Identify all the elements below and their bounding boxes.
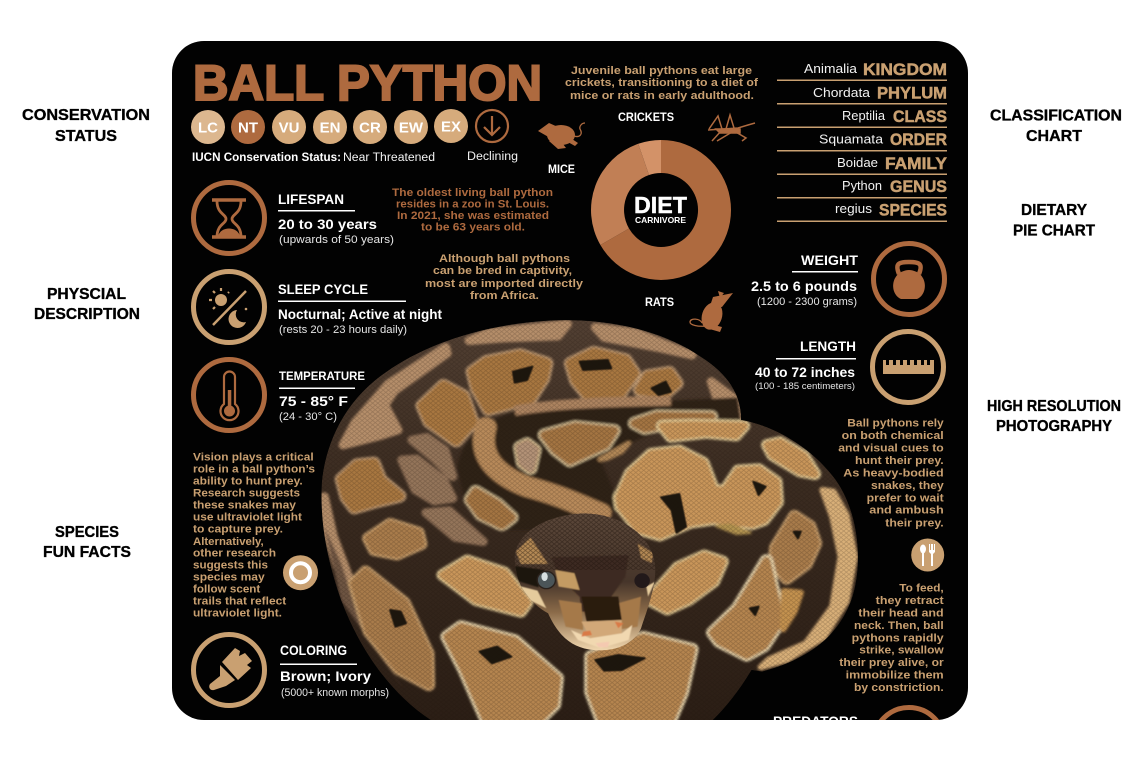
- dietary pie chart: DIET: [634, 192, 687, 218]
- pie label: crickets: CRICKETS: [618, 112, 674, 124]
- fun fact: hunting: prefer to wait: [867, 492, 944, 504]
- fun fact: oldest python: The oldest living ball python: [392, 187, 553, 199]
- fun fact: hunting: [838, 418, 944, 529]
- fun fact: vision: follow scent: [193, 584, 261, 596]
- side label: classification chart: CHART: [1026, 128, 1082, 145]
- icon: mouse: [538, 123, 585, 149]
- fun fact: juvenile diet: [565, 65, 758, 102]
- rank: phylum: PHYLUM: [877, 84, 947, 102]
- fun fact: feeding: by constriction.: [854, 682, 944, 694]
- fun fact: hunting: on both chemical: [842, 430, 944, 442]
- icon: cricket: [708, 115, 755, 141]
- rank: species: SPECIES: [879, 200, 947, 220]
- fun fact: feeding: To feed,: [899, 583, 944, 595]
- rank: order: ORDER: [890, 130, 947, 149]
- fun fact: hunting: and ambush: [869, 505, 944, 517]
- rank: class: CLASS: [893, 107, 947, 126]
- fun fact: juvenile diet: mice or rats in early adulthood.: [570, 90, 754, 102]
- side label: dietary pie chart: [1013, 202, 1095, 240]
- conservation status circles: EX: [441, 118, 461, 136]
- fun fact: vision: these snakes may: [193, 500, 296, 512]
- snake photograph: [320, 310, 881, 730]
- conservation status caption: IUCN Conservation Status:: [192, 152, 341, 164]
- fun fact: hunting: their prey.: [885, 517, 944, 529]
- fun fact: oldest python: to be 63 years old.: [421, 222, 525, 234]
- fun fact: hunting: hunt their prey.: [855, 455, 944, 467]
- panel: lifespan: [194, 182, 394, 254]
- panel: length: (100 - 185 centimeters): [755, 381, 855, 392]
- conservation status circles: EN: [320, 120, 340, 136]
- side label: high resolution photography: PHOTOGRAPHY: [996, 418, 1112, 435]
- rank: order: [777, 133, 948, 152]
- fun fact: feeding: strike, swallow: [859, 644, 944, 656]
- panel: length: 40 to 72 inches: [755, 364, 855, 380]
- panel: weight: (1200 - 2300 grams): [757, 296, 857, 308]
- fun fact: vision: ultraviolet light.: [193, 608, 282, 620]
- conservation status circles: EW: [399, 120, 424, 136]
- fun fact: juvenile diet: Juvenile ball pythons eat large: [571, 65, 752, 77]
- side label: conservation status: [22, 107, 150, 145]
- fun fact: vision: [193, 452, 315, 620]
- panel: coloring: (5000+ known morphs): [281, 687, 389, 699]
- rank: species: [777, 204, 947, 222]
- pie label: rats: RATS: [645, 297, 674, 309]
- fun fact: captivity: most are imported directly: [425, 278, 583, 290]
- rank: genus: GENUS: [890, 177, 947, 196]
- fun fact: hunting: As heavy-bodied: [843, 468, 944, 480]
- side label: physical description: DESCRIPTION: [34, 306, 140, 323]
- side label: classification chart: CLASSIFICATION: [990, 108, 1122, 124]
- icon: kettlebell: [874, 244, 944, 314]
- side label: high resolution photography: HIGH RESOLUTION: [987, 398, 1121, 415]
- fun fact: vision: to capture prey.: [193, 524, 283, 536]
- fun fact: feeding: immobilize them: [846, 669, 944, 681]
- fun fact: vision: other research: [193, 548, 276, 560]
- panel: weight: [751, 244, 944, 314]
- rank: class: [777, 110, 947, 128]
- conservation status circles: [191, 109, 468, 144]
- side label: physical description: PHYSCIAL: [47, 286, 126, 303]
- upper middle coil: [458, 397, 741, 530]
- side label: dietary pie chart: DIETARY: [1021, 202, 1087, 219]
- fun fact: captivity: can be bred in captivity,: [433, 265, 572, 277]
- dark markings: [390, 360, 801, 671]
- side label: species fun facts: FUN FACTS: [43, 544, 131, 561]
- side label: species fun facts: SPECIES: [55, 524, 119, 541]
- fun fact: feeding: neck. Then, ball: [854, 620, 944, 632]
- fun fact: feeding: [839, 583, 945, 694]
- conservation status caption: Declining: [467, 151, 518, 163]
- fun fact: feeding: their prey alive, or: [839, 657, 945, 669]
- rank: phylum: Chordata: [813, 85, 871, 100]
- conservation status circles: NT: [238, 120, 258, 136]
- rank: species: regius: [835, 201, 873, 216]
- fun fact: vision: suggests this: [193, 560, 268, 572]
- panel: sleep cycle: (rests 20 - 23 hours daily): [279, 324, 407, 336]
- fun fact: captivity: from Africa.: [470, 290, 539, 302]
- rank: kingdom: KINGDOM: [863, 60, 947, 79]
- snake head: [513, 510, 657, 650]
- fun fact: feeding: they retract: [876, 595, 944, 607]
- lower and right patches: [324, 527, 404, 690]
- fun fact: juvenile diet: crickets, transitioning to a diet of: [565, 77, 758, 89]
- side label: species fun facts: [43, 524, 131, 561]
- rank: class: Reptilia: [842, 108, 886, 123]
- icon: rat: [690, 291, 733, 332]
- dietary pie chart: [591, 140, 731, 280]
- panel: length: LENGTH: [800, 339, 856, 354]
- classification chart: [777, 60, 948, 222]
- panel: predators (cropped): [773, 708, 944, 760]
- fun fact: vision: use ultraviolet light: [193, 512, 302, 524]
- panel: temperature: 75 - 85° F: [279, 393, 348, 409]
- icon: declining arrow: [476, 110, 508, 142]
- side label: classification chart: [990, 108, 1122, 145]
- panel: infographic poster: [172, 41, 968, 760]
- fun fact: vision: Research suggests: [193, 488, 300, 500]
- panel: sleep cycle: Nocturnal; Active at night: [278, 306, 442, 322]
- conservation status circles: VU: [279, 120, 299, 136]
- fun fact: feeding: pythons rapidly: [852, 633, 944, 645]
- panel: coloring: COLORING: [280, 643, 347, 658]
- panel: lifespan: 20 to 30 years: [278, 216, 377, 232]
- side label: conservation status: CONSERVATION: [22, 107, 150, 124]
- scale texture: [320, 310, 881, 730]
- panel: temperature: (24 - 30° C): [279, 411, 337, 423]
- panel: coloring: [194, 634, 389, 706]
- panel: lifespan: (upwards of 50 years): [279, 234, 394, 246]
- icon: paint brush: [194, 634, 264, 706]
- rank: kingdom: Animalia: [804, 61, 858, 76]
- side label: physical description: [34, 286, 140, 323]
- conservation status caption: [192, 151, 518, 162]
- panel: temperature: TEMPERATURE: [279, 369, 365, 383]
- panel: length: [755, 332, 944, 402]
- rank: genus: Python: [842, 178, 882, 193]
- conservation status caption: Near Threatened: [343, 152, 435, 164]
- icon: hourglass: [194, 182, 264, 254]
- fun fact: vision: Alternatively,: [193, 536, 264, 548]
- title: BALL PYTHON: [193, 55, 542, 111]
- icon: fork and spoon: [911, 538, 944, 572]
- fun fact: oldest python: resides in a zoo in St. Louis.: [396, 198, 549, 210]
- fun fact: vision: trails that reflect: [193, 596, 287, 608]
- rank: kingdom: [777, 63, 947, 81]
- fun fact: hunting: Ball pythons rely: [847, 418, 944, 430]
- side label: conservation status: STATUS: [55, 128, 117, 145]
- panel: lifespan: LIFESPAN: [278, 192, 344, 207]
- panel: sleep cycle: SLEEP CYCLE: [278, 282, 368, 297]
- panel: temperature: [194, 360, 365, 430]
- rank: family: Boidae: [837, 155, 878, 170]
- side label: high resolution photography: [987, 398, 1121, 435]
- fun fact: vision: Vision plays a critical: [193, 452, 314, 464]
- fun fact: captivity: Although ball pythons: [439, 253, 570, 265]
- fun fact: captivity: [425, 253, 583, 302]
- pie label: mice: MICE: [548, 164, 575, 176]
- rank: family: [777, 157, 947, 175]
- fun fact: hunting: snakes, they: [871, 480, 944, 492]
- icon: thermometer: [194, 360, 264, 430]
- fun fact: oldest python: In 2021, she was estimated: [397, 210, 549, 222]
- fun fact: vision: ability to hunt prey.: [193, 476, 303, 488]
- side label: dietary pie chart: PIE CHART: [1013, 222, 1095, 240]
- rank: genus: [777, 180, 947, 198]
- fun fact: oldest python: [392, 187, 553, 234]
- rank: family: FAMILY: [885, 154, 948, 173]
- fun fact: hunting: and visual cues to: [838, 443, 944, 455]
- dietary pie chart: CARNIVORE: [635, 215, 686, 225]
- rank: order: Squamata: [819, 132, 884, 146]
- fun fact: feeding: their head and: [858, 608, 944, 620]
- icon: sun and moon: [194, 272, 264, 342]
- conservation status circles: LC: [198, 120, 218, 136]
- panel: predators (cropped): PREDATORS: [773, 714, 858, 729]
- rank: phylum: [777, 86, 947, 104]
- panel: weight: WEIGHT: [801, 253, 859, 268]
- conservation status circles: CR: [359, 120, 381, 136]
- panel: coloring: Brown; Ivory: [280, 668, 371, 684]
- panel: weight: 2.5 to 6 pounds: [751, 278, 857, 294]
- fun fact: vision: species may: [193, 572, 265, 584]
- fun fact: vision: role in a ball python’s: [193, 464, 315, 476]
- panel: sleep cycle: [194, 272, 442, 342]
- icon: ruler: [872, 332, 944, 402]
- icon: sun: [283, 555, 318, 590]
